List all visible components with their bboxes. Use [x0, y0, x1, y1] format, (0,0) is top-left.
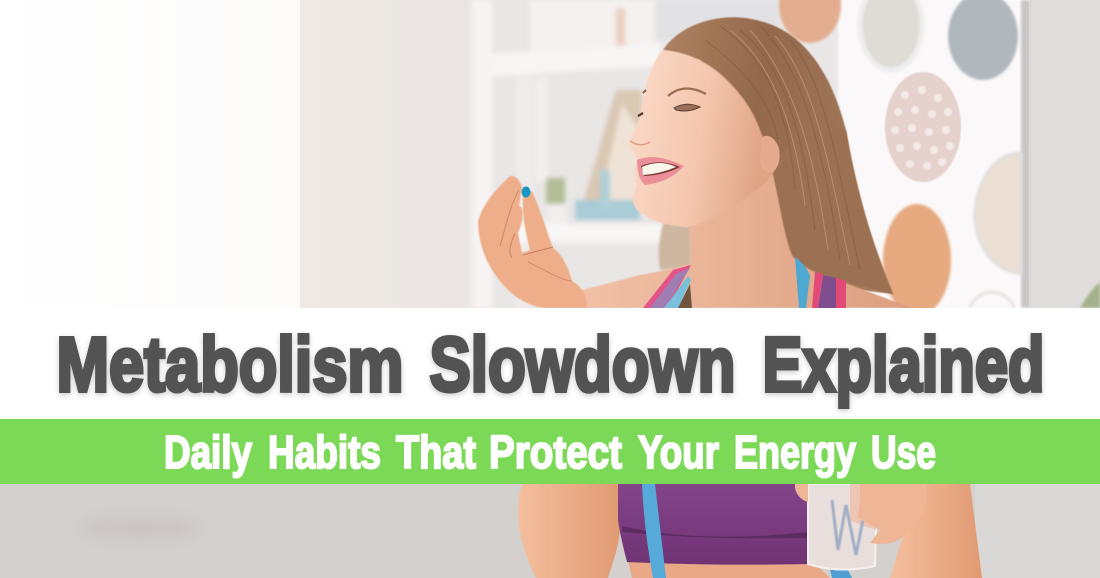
white title band [0, 308, 1100, 419]
woman: hand holding capsule [478, 176, 587, 308]
sofa fold [75, 520, 205, 536]
beige oval [860, 0, 922, 70]
woman: sports top straps [643, 257, 846, 308]
panel: photo background [0, 0, 1100, 308]
green subtitle band [0, 419, 1100, 484]
woman: hair back [663, 17, 893, 294]
subtitle [164, 426, 936, 478]
panel: lower photo strip [0, 484, 1100, 578]
waist [628, 560, 830, 578]
glass of water [808, 484, 877, 570]
woman: neck and shoulders [582, 170, 912, 308]
title [56, 322, 1044, 408]
woman: ear [760, 136, 780, 173]
right arm [890, 484, 982, 578]
subtitle: Energy [734, 426, 856, 478]
left arm [518, 484, 620, 578]
subtitle: That [396, 426, 476, 478]
title: Metabolism [56, 322, 404, 408]
faint lower ring [968, 292, 1016, 344]
fingers [858, 484, 927, 544]
woman: face [629, 50, 776, 227]
subtitle: Use [871, 426, 936, 478]
woman: hair strands [705, 26, 860, 270]
subtitle: Daily [164, 426, 252, 478]
wall art canvas [779, 0, 1030, 344]
woman: hair overlay right of neck [772, 130, 893, 294]
striped orange circle [779, 0, 841, 43]
beige oval right [975, 153, 1021, 273]
title: Slowdown [430, 322, 736, 408]
bookshelf [472, 0, 780, 308]
subtitle: Habits [268, 426, 381, 478]
measuring tape [642, 484, 666, 578]
subtitle: Protect [489, 426, 622, 478]
woman: eye and eyebrow [630, 88, 706, 145]
purple sports top [618, 484, 810, 565]
grey-blue oval [948, 0, 1018, 80]
subtitle: Your [638, 426, 719, 478]
woman: lighter hair behind neck [659, 222, 692, 270]
orange oval [883, 204, 951, 316]
dotted rosette [885, 72, 961, 182]
woman: smile [637, 157, 684, 185]
icon: blue capsule [522, 186, 530, 198]
